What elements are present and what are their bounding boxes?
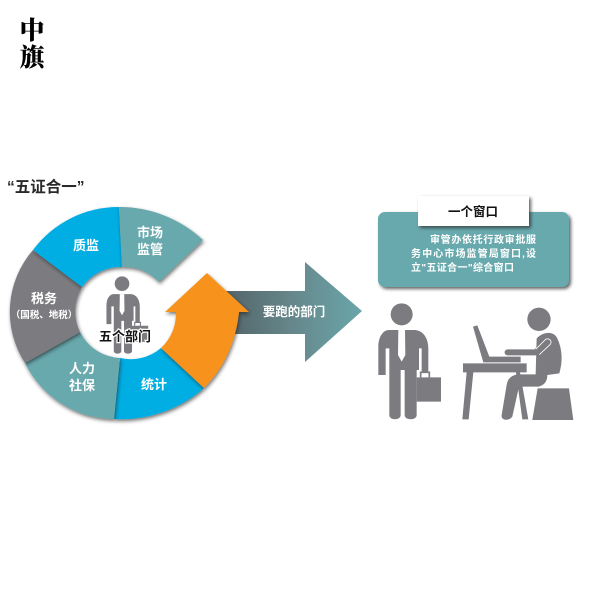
icon: small businessman (106, 276, 148, 354)
segment: 税务: （国税、地税） (11, 309, 77, 321)
stool (532, 388, 573, 420)
logo: 中旗 calligraphy: 旗 (19, 38, 46, 74)
segment: 质监: 质监 (73, 238, 99, 253)
segment: 人力社保: 社保 (69, 378, 95, 393)
segment: 市场监管: 市场 (137, 225, 163, 240)
panel text: 务中心市场监管局窗口,设 (411, 247, 536, 260)
panel text: 审管办依托行政审批服 (430, 233, 536, 246)
person head (527, 308, 551, 331)
panel: 一个窗口 (378, 196, 569, 287)
desk (462, 363, 528, 419)
segment: 市场监管: 监管 (137, 242, 163, 257)
segment: 税务 (10, 250, 82, 363)
center label: 五个部门: 五个部门 (99, 329, 151, 344)
person body (502, 333, 562, 420)
segment: 质监 (33, 207, 122, 287)
heading: 五证合一: “五证合一” (7, 177, 85, 196)
arm highlight (536, 339, 551, 355)
panel title tab: 一个窗口 (448, 204, 498, 219)
panel body (378, 212, 569, 287)
logo: 中旗 calligraphy: 中 (19, 11, 45, 47)
segment: 统计: 统计 (141, 377, 167, 392)
segment: 税务: 税务 (31, 291, 57, 306)
segment: 人力社保: 人力 (69, 361, 95, 376)
segment: 市场监管 (119, 207, 203, 282)
segment: 人力社保 (25, 332, 120, 419)
arrow: 要跑的部门 (225, 262, 362, 362)
logo: 中旗 calligraphy (19, 11, 46, 74)
person arm (505, 339, 551, 355)
panel text (411, 233, 536, 274)
segment: 统计 (114, 348, 204, 419)
orange arrow segment (161, 273, 249, 388)
arrow: 要跑的部门: 要跑的部门 (263, 304, 325, 319)
icon: person working at laptop (462, 308, 573, 420)
laptop (473, 325, 521, 362)
panel text: 立"五证合一"综合窗口 (411, 261, 514, 274)
icon: businessman with briefcase (378, 303, 441, 419)
panel title tab (418, 196, 529, 226)
ring diagram: five departments (10, 207, 249, 419)
